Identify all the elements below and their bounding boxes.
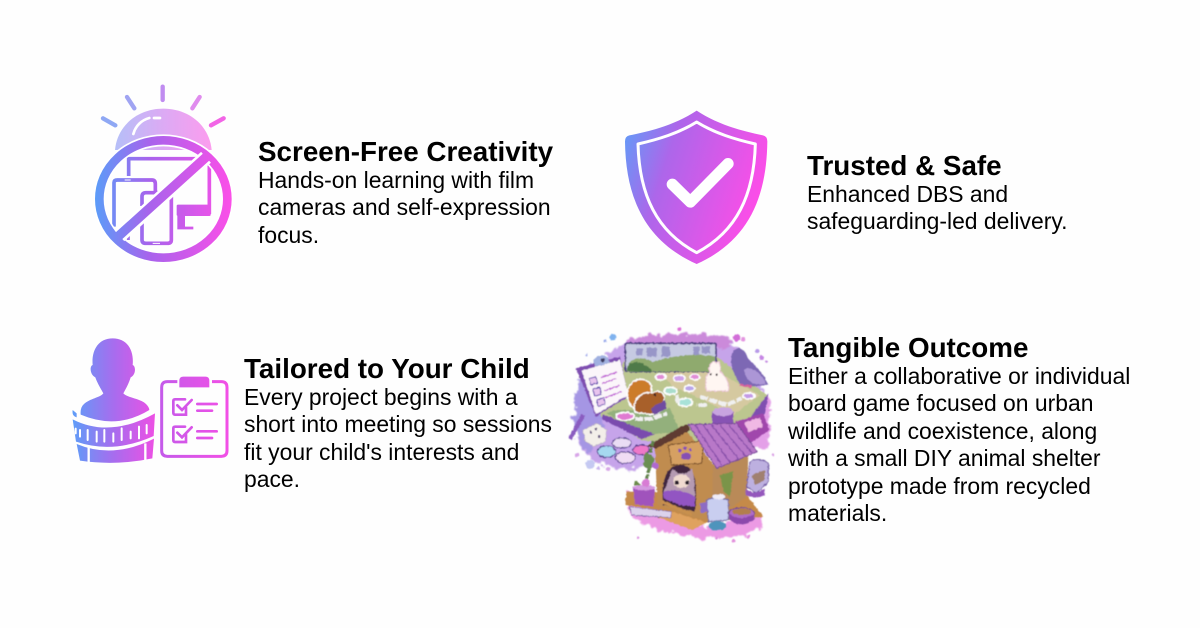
illustration: board game and DIY animal shelter bbox=[568, 326, 775, 543]
text: Tangible Outcome: with a small DIY animal shelter bbox=[788, 445, 1101, 471]
text: Tailored to Your Child: pace. bbox=[244, 466, 300, 492]
ground bbox=[625, 492, 763, 530]
text: Tangible Outcome: Tangible Outcome bbox=[788, 332, 1028, 363]
paint flecks bbox=[575, 327, 775, 543]
paw sign bbox=[668, 441, 703, 465]
path spaces bbox=[616, 374, 755, 420]
text: Tangible Outcome: prototype made from recycled bbox=[788, 473, 1091, 499]
text: Trusted & Safe: safeguarding-led delivery. bbox=[807, 208, 1067, 234]
text: Screen-Free Creativity: focus. bbox=[258, 222, 319, 248]
feeder bbox=[747, 460, 768, 493]
game board bbox=[600, 357, 767, 443]
shelter walls bbox=[655, 428, 715, 522]
splash background bbox=[574, 333, 770, 539]
rolled paper bbox=[629, 507, 672, 518]
icon: shield with check bbox=[625, 110, 768, 264]
bottle top and card box bbox=[712, 412, 733, 430]
rabbit bbox=[706, 362, 729, 391]
checklist book bbox=[576, 357, 628, 417]
text: Trusted & Safe bbox=[807, 150, 1067, 234]
vines and flowers bbox=[644, 442, 653, 483]
text: Trusted & Safe: Enhanced DBS and bbox=[807, 181, 1008, 207]
landscape panel bbox=[625, 343, 716, 372]
shelter roof bbox=[688, 423, 757, 468]
text: Tangible Outcome: wildlife and coexistence, along bbox=[788, 418, 1097, 444]
text: Trusted & Safe: Trusted & Safe bbox=[807, 150, 1002, 181]
flower pot bbox=[633, 487, 655, 507]
text: Tailored to Your Child: Every project begins with a bbox=[244, 384, 518, 410]
icon: child with tape measure and checklist bbox=[72, 338, 228, 463]
text: Tangible Outcome: Either a collaborative or individual bbox=[788, 363, 1130, 389]
jar bottle bbox=[707, 497, 728, 522]
dice and tokens bbox=[583, 423, 607, 447]
text: Tangible Outcome: materials. bbox=[788, 500, 887, 526]
icon: no screens under a dome bbox=[95, 84, 232, 262]
text: Screen-Free Creativity: cameras and self-expression bbox=[258, 194, 551, 220]
text: Tailored to Your Child: Tailored to Your Child bbox=[244, 353, 530, 384]
text: Screen-Free Creativity: Screen-Free Creativity bbox=[258, 136, 553, 167]
text: Tailored to Your Child bbox=[244, 353, 552, 492]
text: Tangible Outcome bbox=[788, 332, 1130, 526]
text: Tangible Outcome: board game focused on urban bbox=[788, 390, 1093, 416]
food bowl bbox=[729, 508, 754, 519]
text: Tailored to Your Child: short into meeting so sessions bbox=[244, 411, 552, 437]
text: Screen-Free Creativity: Hands-on learning with film bbox=[258, 167, 534, 193]
text: Screen-Free Creativity bbox=[258, 136, 553, 248]
shelter door bbox=[662, 465, 696, 512]
text: Tailored to Your Child: fit your child's interests and bbox=[244, 439, 519, 465]
squirrel bbox=[627, 379, 652, 412]
pigeon bbox=[731, 348, 768, 387]
